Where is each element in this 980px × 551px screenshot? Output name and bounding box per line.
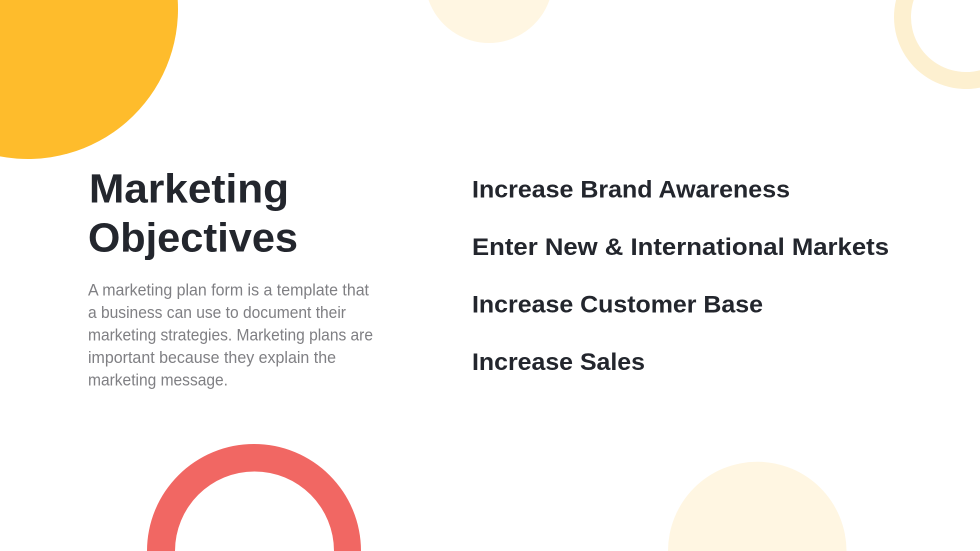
description text block: A marketing plan form is a template that [88, 282, 369, 300]
description text block: important because they explain the [88, 349, 336, 367]
pale cream ring, top right [894, 0, 980, 89]
coral ring, bottom left [147, 444, 361, 551]
description text block [88, 282, 373, 390]
yellow circle, top left [0, 0, 178, 159]
title: Marketing [89, 166, 289, 212]
description text block: a business can use to document their [88, 304, 346, 322]
pale cream circle, top centre [429, 0, 549, 43]
objective 1: Increase Brand Awareness [472, 177, 790, 204]
title: Objectives [88, 214, 298, 260]
description text block: marketing strategies. Marketing plans are [88, 326, 373, 344]
pale cream circle, bottom right [668, 462, 846, 551]
objective 3: Increase Customer Base [472, 292, 763, 319]
objective 4: Increase Sales [472, 349, 645, 376]
objective 2: Enter New & International Markets [472, 234, 889, 261]
title [88, 166, 298, 260]
description text block: marketing message. [88, 372, 228, 390]
objectives list [472, 177, 889, 376]
